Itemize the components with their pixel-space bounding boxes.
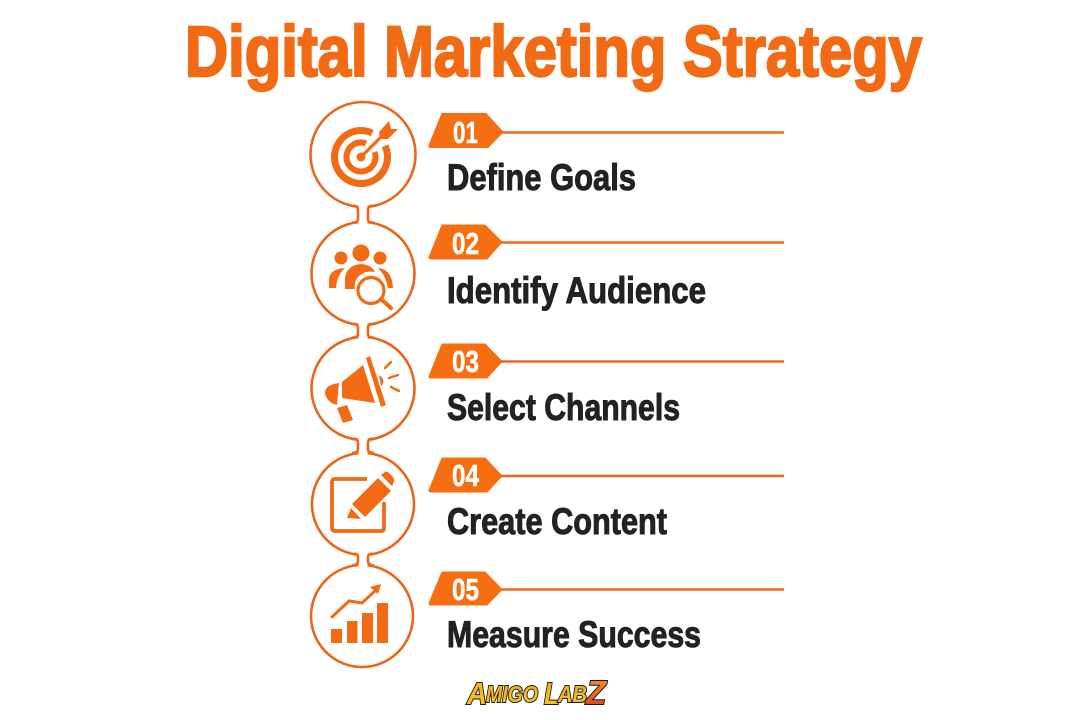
number tag 03: 03 <box>452 344 479 379</box>
logo: amigo labz: Z <box>585 674 608 711</box>
step 1: define goals <box>334 114 784 198</box>
icon: edit pencil <box>332 472 394 531</box>
number tag 04: 04 <box>452 458 480 493</box>
label: select channels: Select Channels <box>447 387 680 428</box>
step 5: measure success <box>331 572 784 655</box>
number tag 03 <box>429 344 784 379</box>
circular timeline chain <box>310 102 416 667</box>
icon: audience with magnifier <box>329 244 393 308</box>
number tag 02 <box>429 225 784 261</box>
icon: megaphone <box>325 356 399 423</box>
title: Digital Marketing Strategy <box>185 13 922 92</box>
number tag 02: 02 <box>452 226 479 261</box>
logo: amigo labz: MIGO <box>486 681 538 707</box>
logo: amigo labz: AB <box>557 681 587 707</box>
number tag 05: 05 <box>452 572 479 607</box>
number tag 01 <box>429 114 784 150</box>
step 2: identify audience <box>329 225 784 311</box>
label: create content: Create Content <box>447 501 667 542</box>
number tag 05 <box>429 572 784 607</box>
logo: amigo labz <box>466 674 608 711</box>
number tag 04 <box>429 458 784 493</box>
step 4: create content <box>332 458 784 542</box>
logo: amigo labz: A <box>466 676 487 711</box>
icon: target with arrow <box>334 121 398 184</box>
icon: growth chart <box>331 584 388 643</box>
label: measure success: Measure Success <box>447 614 701 655</box>
label: identify audience: Identify Audience <box>447 270 706 311</box>
logo: amigo labz: L <box>544 676 560 711</box>
label: define goals: Define Goals <box>447 157 636 198</box>
number tag 01: 01 <box>453 115 478 150</box>
step 3: select channels <box>325 344 784 428</box>
